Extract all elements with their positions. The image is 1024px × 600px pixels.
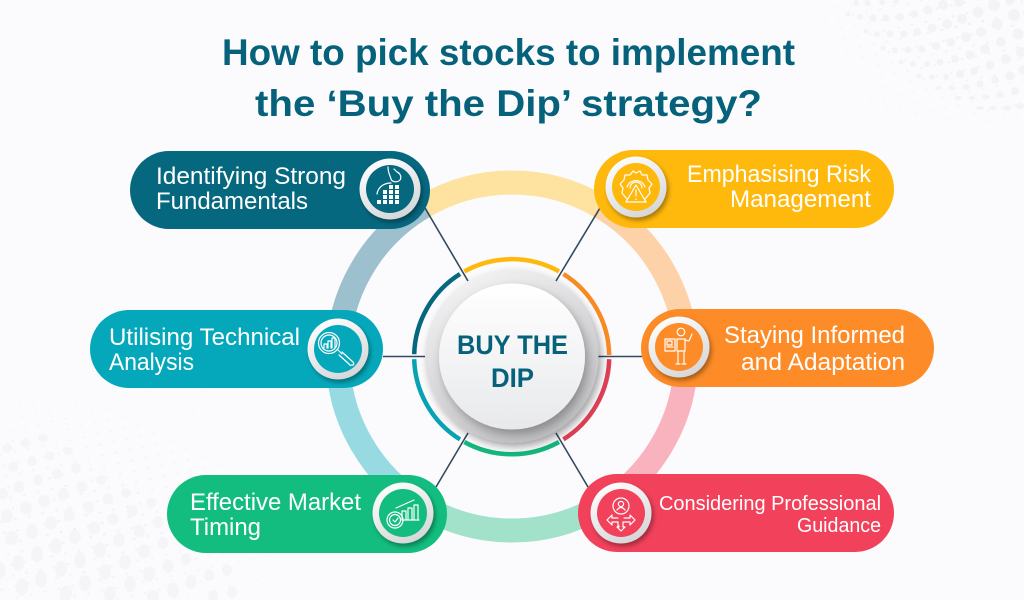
panel: considering professional guidance (578, 474, 894, 552)
panel: considering professional guidance: Guidance (797, 515, 881, 537)
icon: hand placing blocks (360, 158, 420, 220)
panel: considering professional guidance: Considering Professional (659, 493, 881, 515)
panel: staying informed and adaptation: Staying Informed (724, 322, 905, 349)
panel: effective market timing (167, 475, 447, 553)
panel: staying informed and adaptation (641, 309, 934, 387)
panel: emphasising risk management: Emphasising Risk (687, 161, 872, 188)
panel: identifying strong fundamentals: Identifying Strong (156, 163, 346, 190)
centre badge: buy the dip: BUY THE (457, 330, 568, 360)
centre badge: buy the dip (425, 269, 598, 443)
panel: identifying strong fundamentals (130, 151, 430, 229)
panel: identifying strong fundamentals: Fundamentals (156, 188, 308, 215)
icon: clock with rising bars (372, 482, 434, 544)
panel: emphasising risk management: Management (730, 186, 871, 213)
title (222, 32, 795, 124)
icon: magnifier over bar chart (308, 318, 368, 380)
panel: effective market timing: Effective Market (190, 489, 361, 516)
connector lines (383, 208, 642, 487)
title: the ‘Buy the Dip’ strategy? (255, 83, 762, 124)
centre badge: buy the dip: DIP (491, 363, 534, 393)
panel: emphasising risk management (594, 150, 894, 228)
title: How to pick stocks to implement (222, 32, 795, 73)
icon: person with newspaper (648, 316, 710, 378)
panel: utilising technical analysis (90, 310, 383, 388)
icon: gear with warning triangle (606, 156, 666, 218)
panel: utilising technical analysis: Utilising Technical (109, 324, 300, 351)
panel: effective market timing: Timing (190, 514, 261, 541)
panel: utilising technical analysis: Analysis (109, 349, 194, 376)
panel: staying informed and adaptation: and Adaptation (741, 349, 905, 376)
inner coloured arcs (414, 259, 609, 454)
outer ring with six pale segments (338, 182, 686, 531)
icon: person at crossroads (590, 482, 652, 544)
